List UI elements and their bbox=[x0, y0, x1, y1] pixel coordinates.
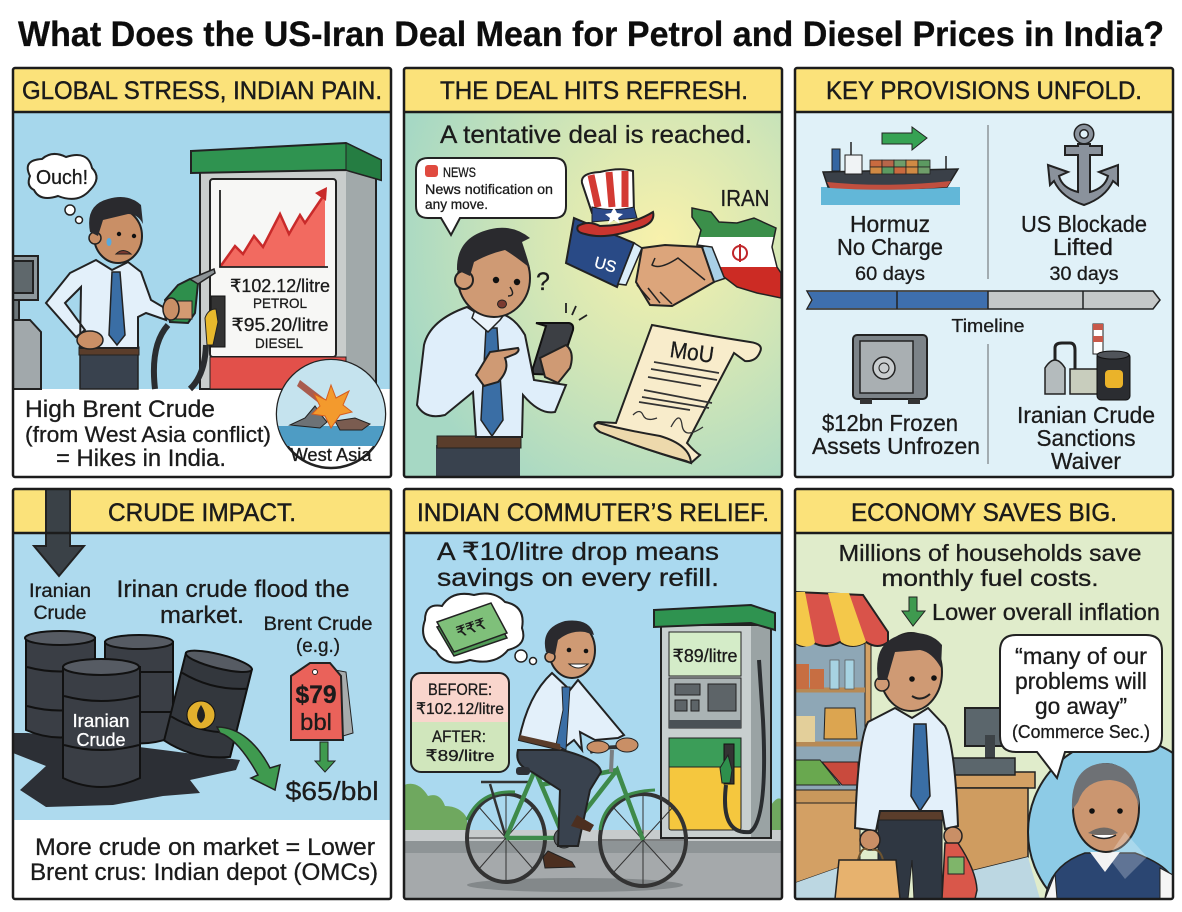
timeline bar: Timeline bbox=[952, 316, 1024, 336]
text: Iranian crude label bbox=[29, 581, 91, 624]
speech bubble: news: News notification on bbox=[425, 181, 553, 197]
text: explanation bbox=[25, 396, 271, 472]
speech bubble: quote: (Commerce Sec.) bbox=[1012, 722, 1150, 742]
icon: green arrow bbox=[217, 727, 280, 790]
heading: commuter: INDIAN COMMUTER’S RELIEF. bbox=[417, 499, 769, 527]
shop bbox=[795, 592, 1040, 899]
price before and after: ₹89/litre bbox=[426, 748, 495, 765]
text: frozen assets: $12bn Frozen bbox=[822, 410, 958, 436]
text: explanation: = Hikes in India. bbox=[56, 445, 226, 472]
timeline bar bbox=[807, 291, 1160, 336]
speech bubble: news: any move. bbox=[425, 196, 488, 212]
panel: key provisions bbox=[795, 68, 1173, 477]
text: US blockade: 30 days bbox=[1050, 264, 1118, 285]
price tag bbox=[264, 614, 378, 806]
panel: crude impact bbox=[13, 489, 391, 899]
heading: crude impact: CRUDE IMPACT. bbox=[108, 499, 296, 527]
icon: safe bbox=[853, 335, 927, 404]
thought bubble with money: ₹₹₹ bbox=[454, 616, 488, 641]
person at pump bbox=[46, 197, 215, 389]
oil barrels and spill bbox=[13, 631, 254, 807]
text: crude waiver: Sanctions bbox=[1036, 425, 1136, 451]
text: market conclusion: Brent crus: Indian depot (OMCs) bbox=[30, 859, 378, 886]
panel: Indian commuter's relief bbox=[404, 489, 782, 899]
speech bubble: news bbox=[416, 158, 566, 235]
panel: economy saves big bbox=[795, 489, 1182, 912]
text: frozen assets: Assets Unfrozen bbox=[812, 433, 980, 459]
icon: handshake with Uncle Sam hat: US bbox=[592, 254, 618, 277]
icon and text: lower inflation: Lower overall inflation bbox=[932, 599, 1160, 625]
icon: anchor bbox=[1048, 127, 1118, 205]
text: explanation: (from West Asia conflict) bbox=[25, 422, 271, 447]
text: savings bbox=[437, 538, 719, 592]
icon: down arrow bbox=[34, 489, 84, 576]
icon: left kiosk bbox=[13, 256, 41, 389]
text: households: monthly fuel costs. bbox=[882, 565, 1098, 591]
text: households: Millions of households save bbox=[838, 540, 1142, 566]
text: Hormuz bbox=[837, 211, 943, 285]
speech bubble: quote: go away” bbox=[1035, 693, 1127, 719]
text: flood the market bbox=[116, 576, 350, 629]
icon: refinery and barrel bbox=[1045, 324, 1130, 400]
fuel pump with prices: ₹95.20/litre bbox=[232, 315, 328, 335]
text: Hormuz: 60 days bbox=[855, 264, 925, 285]
fuel pump: ₹89/litre bbox=[672, 646, 738, 666]
text: flood the market: Irinan crude flood the bbox=[116, 576, 350, 603]
person with phone bbox=[417, 228, 587, 476]
icon: West Asia conflict: West Asia bbox=[290, 445, 373, 465]
text: tentative deal: A tentative deal is reached. bbox=[440, 121, 752, 149]
fuel pump with prices: ₹102.12/litre bbox=[230, 276, 330, 296]
text: savings: A ₹10/litre drop means bbox=[437, 538, 719, 566]
price tag: $79 bbox=[296, 681, 336, 709]
fuel pump with prices: PETROL bbox=[253, 295, 307, 311]
text: crude waiver: Waiver bbox=[1051, 448, 1121, 474]
text: Hormuz: No Charge bbox=[837, 234, 943, 260]
price before and after bbox=[411, 673, 509, 772]
portrait: commerce secretary bbox=[1027, 745, 1172, 898]
text: crude waiver: Iranian Crude bbox=[1017, 402, 1155, 428]
person with phone: ? bbox=[536, 268, 550, 296]
fuel pump bbox=[654, 605, 775, 838]
speech bubble: quote bbox=[1000, 635, 1162, 778]
text: households bbox=[838, 540, 1142, 591]
price tag: (e.g.) bbox=[296, 636, 340, 657]
price tag: $65/bbl bbox=[286, 776, 378, 806]
text: market conclusion bbox=[30, 834, 378, 886]
text: US blockade: US Blockade bbox=[1021, 211, 1147, 237]
icon: tanker with arrow bbox=[821, 127, 960, 205]
text: savings: savings on every refill. bbox=[437, 564, 719, 592]
price chart bbox=[220, 187, 328, 267]
shopper with bags bbox=[835, 633, 977, 899]
speech bubble: news: NEWS bbox=[443, 164, 476, 180]
speech bubble: quote: “many of our bbox=[1015, 643, 1147, 669]
oil barrels and spill: Iranian bbox=[72, 711, 130, 731]
thought bubble with money bbox=[423, 594, 536, 664]
background bushes and road bbox=[404, 784, 782, 899]
text: flood the market: market. bbox=[160, 602, 244, 629]
icon: handshake with Uncle Sam hat bbox=[566, 169, 726, 306]
heading: economy bbox=[795, 489, 1173, 533]
panel: global stress, Indian pain bbox=[13, 68, 391, 477]
text: crude waiver bbox=[1017, 402, 1155, 474]
title: What Does the US-Iran Deal Mean for Petrol and Diesel Prices in India? bbox=[18, 15, 1164, 54]
heading: deal: THE DEAL HITS REFRESH. bbox=[440, 77, 748, 105]
price before and after: ₹102.12/litre bbox=[416, 701, 504, 718]
text: Hormuz: Hormuz bbox=[850, 211, 930, 237]
text: market conclusion: More crude on market = Lower bbox=[35, 834, 375, 861]
text: frozen assets bbox=[812, 410, 980, 459]
icon: MoU scroll bbox=[594, 325, 761, 463]
heading: provisions bbox=[795, 68, 1173, 112]
icon: MoU scroll: MoU bbox=[668, 336, 716, 368]
heading: global stress bbox=[13, 68, 391, 112]
text: US blockade: Lifted bbox=[1053, 234, 1113, 260]
text: Iranian crude label: Crude bbox=[34, 603, 86, 624]
heading: economy: ECONOMY SAVES BIG. bbox=[851, 499, 1117, 527]
text: US blockade bbox=[1021, 211, 1147, 285]
fuel pump with prices bbox=[191, 143, 381, 389]
speech bubble: quote: problems will bbox=[1015, 668, 1147, 694]
person on bicycle bbox=[467, 621, 686, 887]
text: explanation: High Brent Crude bbox=[25, 396, 215, 423]
icon: Iran map bbox=[690, 185, 785, 300]
price tag: bbl bbox=[300, 709, 332, 735]
icon: West Asia conflict bbox=[277, 360, 385, 468]
text: Iranian crude label: Iranian bbox=[29, 581, 91, 602]
fuel pump with prices: DIESEL bbox=[255, 335, 303, 351]
price before and after: BEFORE: bbox=[428, 680, 492, 699]
thought bubble: ouch bbox=[28, 154, 97, 224]
heading: commuter bbox=[404, 489, 782, 533]
heading: global stress: GLOBAL STRESS, INDIAN PAIN. bbox=[22, 77, 382, 105]
thought bubble: ouch: Ouch! bbox=[36, 167, 88, 189]
price before and after: AFTER: bbox=[432, 727, 486, 746]
heading: provisions: KEY PROVISIONS UNFOLD. bbox=[826, 77, 1142, 105]
panel: the deal hits refresh bbox=[404, 68, 785, 477]
price tag: Brent Crude bbox=[264, 614, 372, 635]
icon: Iran map: IRAN bbox=[720, 185, 770, 211]
heading: crude impact bbox=[13, 489, 391, 533]
oil barrels and spill: Crude bbox=[76, 730, 126, 750]
heading: deal bbox=[404, 68, 782, 112]
